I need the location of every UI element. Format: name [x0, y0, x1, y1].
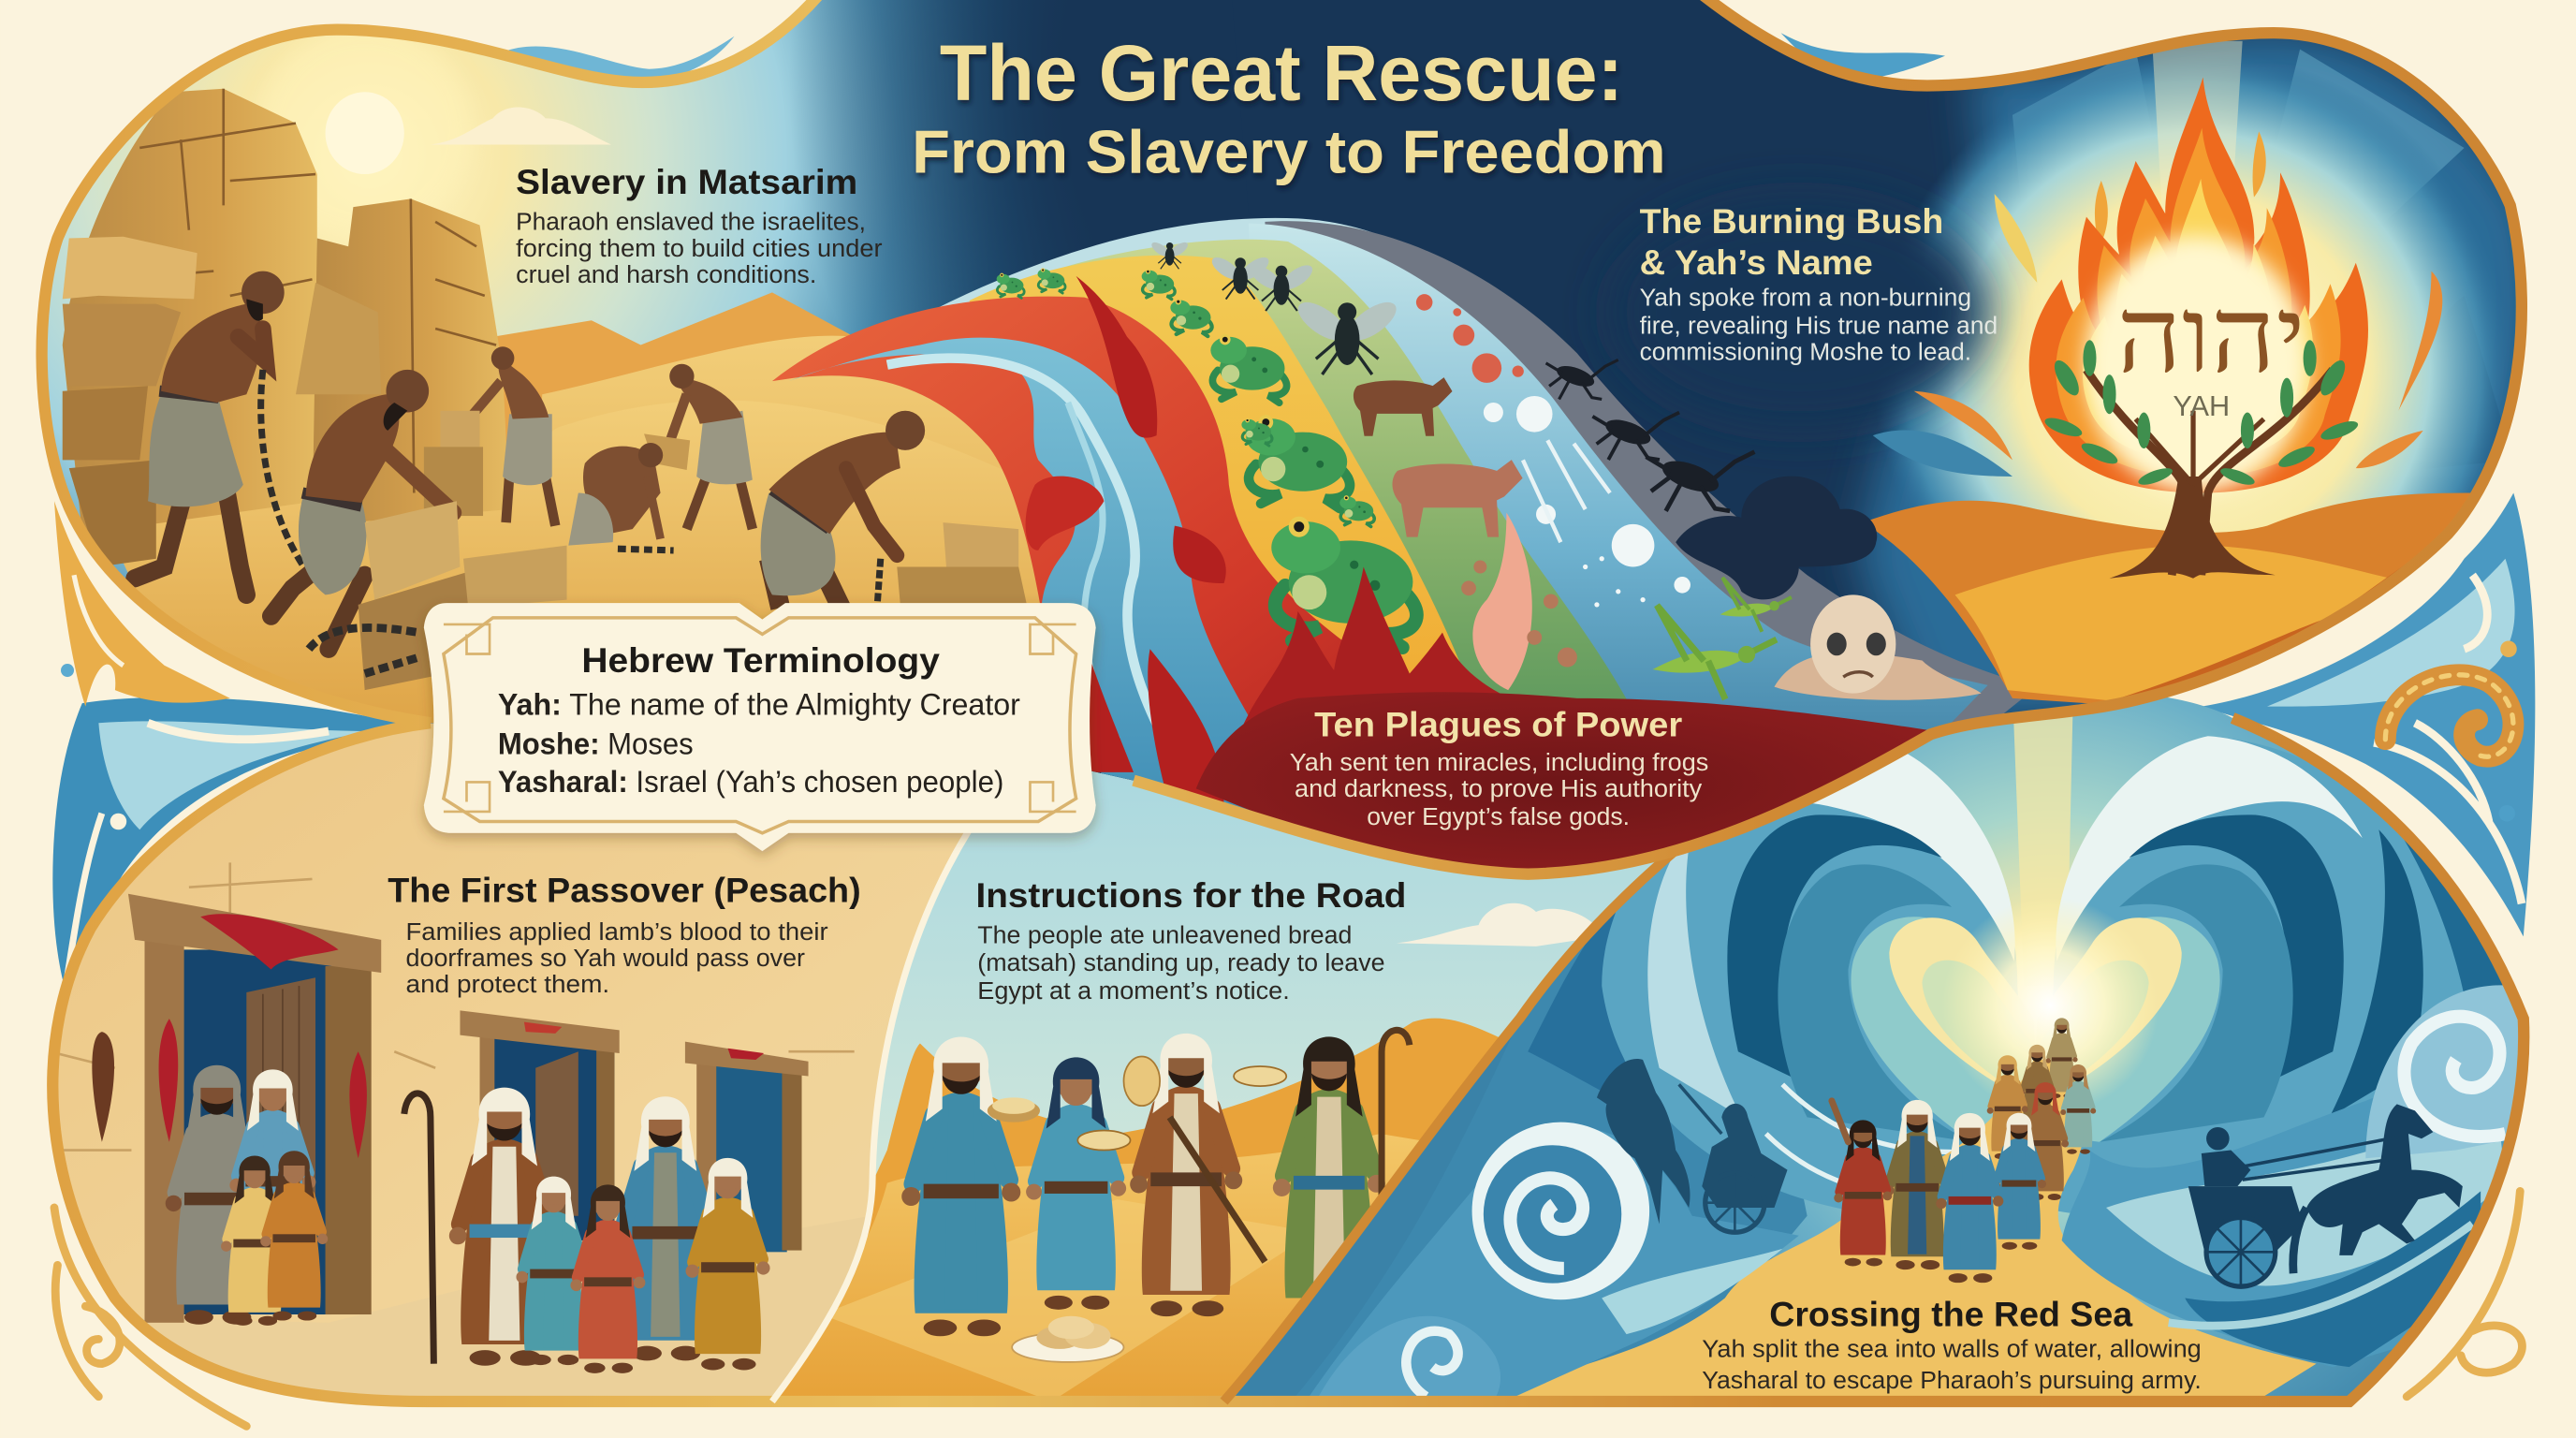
text block: slavery in matsarim: Slavery in Matsarim	[516, 163, 857, 201]
definition: yasharal: Yasharal: Israel (Yah’s chosen people)	[498, 765, 1003, 799]
text block: first passover: The First Passover (Pesach)	[388, 872, 861, 910]
israelites crossing crowd	[1834, 1018, 2096, 1283]
stone walls	[63, 89, 509, 566]
text block: burning bush: fire, revealing His true name and	[1640, 311, 1998, 339]
boils	[1416, 294, 1577, 690]
dunes	[772, 1019, 1528, 1401]
ornament: top right wave	[1781, 33, 1945, 80]
text block: ten plagues: Yah sent ten miracles, including frogs	[1290, 748, 1708, 776]
text block: slavery in matsarim: forcing them to build cities under	[516, 234, 883, 262]
panel: hebrew terminology	[424, 603, 1096, 851]
bread plate	[1012, 1316, 1123, 1362]
text block: first passover: doorframes so Yah would pass over	[406, 944, 805, 972]
text block: ten plagues: and darkness, to prove His authority	[1295, 774, 1703, 802]
definition: moshe: Moshe: Moses	[498, 727, 694, 761]
chart band: red	[772, 297, 1479, 822]
panel: lower base	[0, 690, 2576, 1413]
heading: Hebrew Terminology	[581, 641, 940, 680]
family in the street	[449, 1088, 770, 1373]
right wave curl	[2365, 985, 2539, 1158]
family at doorway	[166, 1065, 328, 1326]
text block: instructions for the road: Egypt at a moment’s notice.	[977, 976, 1290, 1005]
chart band: plague of darkness grey	[1265, 221, 2037, 871]
ornament: left margin water swirl	[52, 664, 431, 1003]
chart band: nile river	[788, 338, 1298, 838]
ornament: left margin flame flourish	[54, 501, 230, 707]
title	[912, 29, 1666, 185]
text block: crossing the red sea: Crossing the Red Sea	[1769, 1295, 2133, 1333]
panel border: upper sweep	[42, 0, 2522, 874]
staffs	[1170, 1030, 1410, 1265]
tree	[2042, 340, 2360, 579]
panel: crossing the red sea	[1236, 697, 2518, 1396]
wall marks	[50, 862, 855, 1151]
text block: ten plagues	[1290, 705, 1708, 830]
rear workers	[424, 346, 753, 550]
left foreground wave	[1298, 1123, 1799, 1413]
flies	[1149, 240, 1402, 374]
ground chain	[309, 627, 419, 674]
left chariot silhouette	[1597, 1059, 1788, 1232]
text block: instructions for the road: The people ate unleavened bread	[977, 920, 1352, 948]
far right water	[2404, 841, 2503, 991]
right chariot silhouette	[2188, 1104, 2463, 1286]
worker: bent over stones	[761, 411, 1027, 608]
sun	[258, 24, 472, 238]
definition: yah: Yah: The name of the Almighty Creator	[498, 687, 1020, 721]
ornament: right margin orange spiral	[2385, 675, 2515, 822]
door three	[685, 1042, 809, 1252]
staff	[404, 1093, 433, 1364]
breads	[988, 1056, 1286, 1151]
right water	[2062, 1048, 2539, 1367]
text block: burning bush: & Yah’s Name	[1640, 243, 1873, 282]
door one	[92, 894, 381, 1323]
maroon caption ribbon	[1196, 692, 1935, 877]
cattle	[1354, 377, 1523, 537]
frogs	[997, 268, 1416, 648]
rays	[2013, 717, 2072, 911]
text block: slavery in matsarim: Pharaoh enslaved the israelites,	[516, 208, 866, 236]
sand path	[1454, 1060, 2317, 1410]
floating flames	[1914, 131, 2442, 468]
ornament: right margin blue swirl	[2202, 493, 2535, 936]
ornament: top left wave	[501, 37, 735, 82]
text block: crossing the red sea	[1702, 1295, 2202, 1394]
text block: crossing the red sea: Yah split the sea into walls of water, allowing	[1702, 1335, 2202, 1363]
text block: burning bush: Yah spoke from a non-burning	[1640, 283, 1971, 311]
cloud	[431, 107, 611, 144]
text block: instructions for the road	[976, 876, 1406, 1005]
sun glow	[1942, 897, 2159, 1114]
ornament: bottom right gold flourish	[2407, 1191, 2522, 1397]
text block: instructions for the road: Instructions for the Road	[976, 876, 1406, 915]
dunes	[1863, 493, 2481, 710]
text block: instructions for the road: (matsah) standing up, ready to leave	[977, 948, 1385, 976]
text block: first passover: Families applied lamb’s blood to their	[406, 917, 828, 946]
text block: burning bush	[1640, 202, 1998, 365]
worker: standing in chains	[135, 271, 313, 594]
far left water	[1558, 946, 1807, 1328]
raised arm	[1832, 1101, 1848, 1142]
chart band: yellow	[970, 256, 1477, 805]
plague flames	[1240, 566, 1536, 731]
chart band: green	[1035, 240, 1643, 838]
text block: ten plagues: Ten Plagues of Power	[1314, 705, 1682, 743]
text block: slavery in matsarim	[516, 163, 883, 288]
divine name: יהוה	[2116, 279, 2305, 395]
title line two: From Slavery to Freedom	[912, 117, 1666, 185]
text block: ten plagues: over Egypt’s false gods.	[1367, 802, 1630, 830]
dunes	[493, 292, 1117, 723]
text block: slavery in matsarim: cruel and harsh conditions.	[516, 260, 816, 288]
gold frame	[444, 618, 1076, 833]
cloud	[1397, 903, 1602, 946]
ground	[816, 1135, 1419, 1346]
text block: crossing the red sea: Yasharal to escape Pharaoh’s pursuing army.	[1702, 1366, 2202, 1394]
chart band: pale rim	[903, 218, 1445, 493]
worker: kneeling with block	[271, 370, 567, 690]
panel: upper sweep	[0, 0, 2576, 920]
text block: burning bush: The Burning Bush	[1640, 202, 1943, 241]
corner ornaments	[444, 624, 1076, 812]
panel: burning bush scene	[1863, 77, 2481, 710]
darkness cloud	[1676, 477, 1877, 599]
green locusts	[1653, 578, 1792, 699]
door two	[460, 1010, 620, 1240]
firstborn skull	[1774, 594, 1982, 700]
ground	[98, 401, 1051, 723]
ornament: bottom left gold flourish	[54, 1208, 246, 1426]
hail	[1484, 396, 1690, 607]
yah label: YAH	[2173, 389, 2230, 422]
panel background: burning bush sky	[1610, 33, 2543, 723]
right wave wall	[2054, 736, 2423, 1213]
chart band: hail blue	[1249, 224, 1988, 871]
text block: burning bush: commissioning Moshe to lead.	[1640, 337, 1971, 365]
panel border: lower panels	[52, 716, 2524, 1401]
people holding bread	[901, 1034, 1385, 1336]
burning flame	[2029, 77, 2368, 493]
title line one: The Great Rescue:	[940, 29, 1623, 117]
left wave wall	[1602, 736, 2037, 1218]
text block: first passover: and protect them.	[406, 970, 609, 998]
blood in the river	[1026, 276, 1226, 822]
locusts on grey	[1546, 360, 1754, 511]
card	[424, 603, 1096, 851]
text block: first passover	[388, 872, 861, 998]
panel: instructions for the road	[781, 771, 1655, 1396]
ground	[0, 1216, 887, 1413]
panel: first passover	[58, 736, 963, 1396]
